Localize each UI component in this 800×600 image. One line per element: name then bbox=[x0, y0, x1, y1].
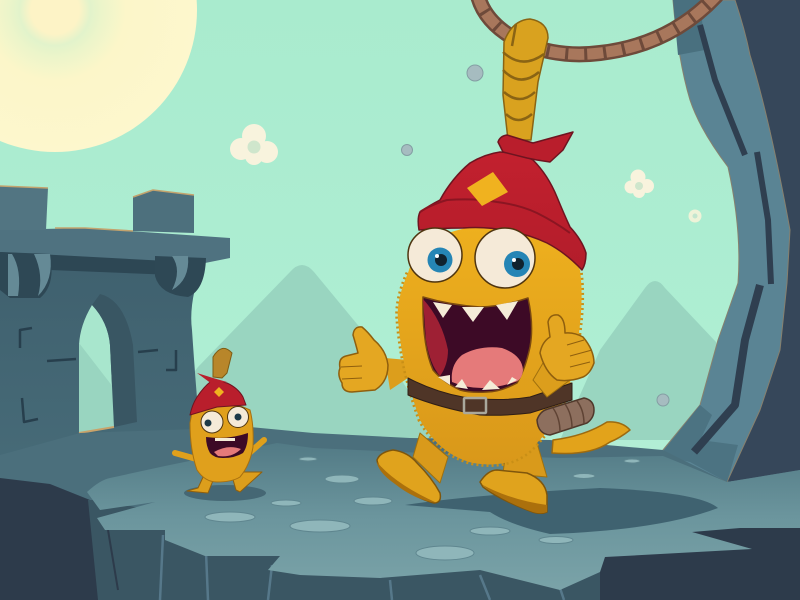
legs bbox=[413, 433, 448, 483]
small eyes bbox=[201, 406, 248, 433]
left dark base bbox=[0, 478, 100, 600]
right arm bbox=[533, 363, 570, 397]
small hat tie bbox=[197, 373, 227, 384]
left foot bbox=[377, 450, 440, 503]
rocky platform bbox=[87, 443, 800, 600]
small legs bbox=[187, 475, 214, 493]
puddles bbox=[205, 457, 640, 560]
log pouch bbox=[537, 398, 594, 435]
clouds and flowers bbox=[230, 124, 702, 222]
main monster bbox=[339, 132, 630, 513]
main monster shadow bbox=[405, 488, 718, 534]
body fur fringe bbox=[398, 270, 582, 464]
small monster bbox=[175, 348, 264, 493]
sun bbox=[0, 0, 197, 152]
right eye bbox=[475, 228, 535, 288]
right thumbs-up hand bbox=[540, 315, 594, 381]
left thumbs-up hand bbox=[339, 327, 388, 392]
small mouth bbox=[206, 433, 248, 458]
small body bbox=[190, 403, 253, 482]
small arms bbox=[175, 440, 264, 460]
hat knot bbox=[498, 132, 573, 162]
rope bbox=[478, 0, 716, 54]
distant mountains bbox=[60, 265, 730, 440]
ground shadow mass bbox=[0, 427, 800, 600]
teeth bbox=[433, 301, 518, 390]
belt bbox=[408, 378, 572, 415]
platform surface bbox=[87, 443, 800, 590]
cliff columns bbox=[88, 500, 620, 600]
small monster shadow bbox=[184, 485, 266, 501]
floating bubbles bbox=[402, 65, 669, 406]
left arm bbox=[385, 358, 408, 390]
mouth bbox=[423, 297, 532, 392]
castle ruin bbox=[0, 186, 230, 455]
body bbox=[398, 225, 582, 464]
lower right darkness bbox=[600, 515, 800, 600]
right foot bbox=[480, 470, 547, 513]
left eye bbox=[408, 228, 462, 282]
hat bbox=[418, 152, 586, 270]
small hat diamond bbox=[214, 387, 224, 397]
hanging yellow knot bbox=[503, 19, 548, 140]
small hat bbox=[190, 380, 246, 415]
hat diamond bbox=[467, 172, 508, 206]
belt buckle bbox=[464, 398, 486, 413]
tongue bbox=[452, 347, 523, 388]
tail bbox=[552, 422, 630, 454]
right rock arch bbox=[663, 0, 800, 482]
small knot bbox=[213, 348, 232, 378]
